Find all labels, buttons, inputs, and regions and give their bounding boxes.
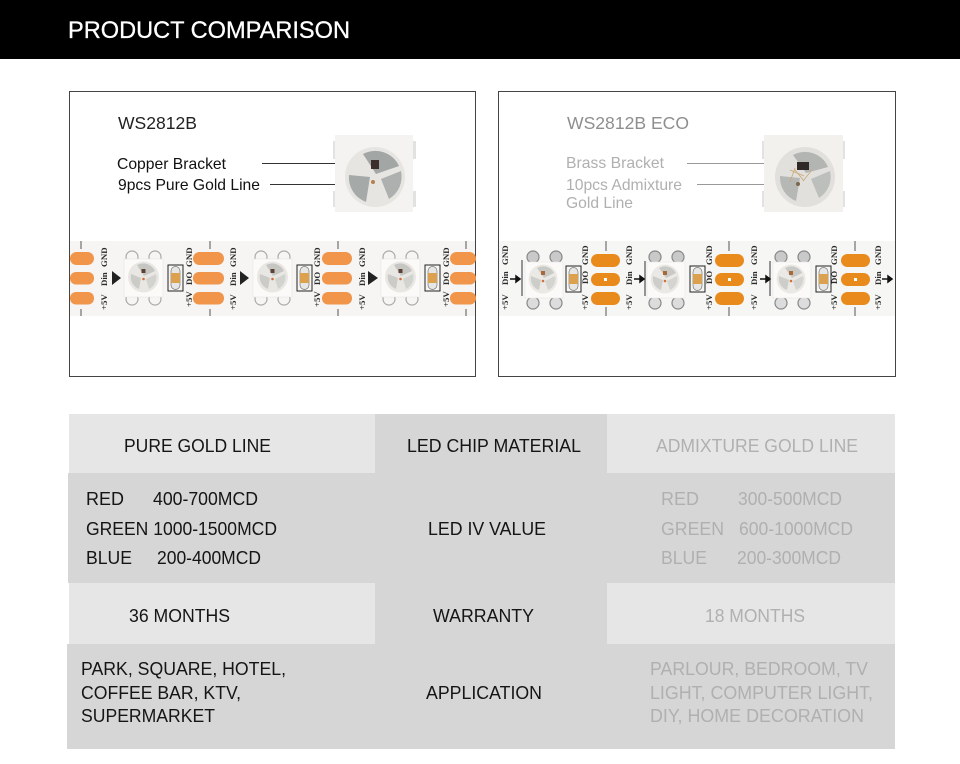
row: LED chip material: ADMIXTURE GOLD LINE bbox=[656, 436, 858, 456]
heading: WS2812B ECO: WS2812B ECO bbox=[567, 113, 689, 133]
LED strip: GND bbox=[228, 247, 238, 267]
row: LED IV value: LED IV VALUE bbox=[428, 519, 546, 539]
row: LED IV value bbox=[68, 473, 895, 583]
LED strip bbox=[70, 241, 476, 316]
LED strip: +5V bbox=[441, 291, 451, 307]
LED strip: +5V bbox=[312, 291, 322, 307]
row: warranty: 36 MONTHS bbox=[129, 606, 230, 626]
LED strip: GND bbox=[580, 245, 590, 265]
label: copper bracket: Copper Bracket bbox=[117, 156, 227, 173]
LED strip: Din bbox=[500, 271, 510, 285]
LED strip: GND bbox=[624, 245, 634, 265]
comparison table bbox=[67, 414, 895, 749]
row: LED IV value: 300-500MCD bbox=[738, 489, 842, 509]
row: application: SUPERMARKET bbox=[81, 706, 215, 726]
LED strip: +5V bbox=[357, 294, 367, 310]
LED strip: GND bbox=[99, 247, 109, 267]
row: LED IV value: BLUE bbox=[661, 548, 707, 568]
LED strip: +5V bbox=[184, 291, 194, 307]
row: warranty: WARRANTY bbox=[433, 606, 534, 626]
row: LED IV value: 200-300MCD bbox=[737, 548, 841, 568]
panel: WS2812B bbox=[70, 92, 476, 376]
label: admixture gold line: 10pcs Admixture bbox=[566, 177, 682, 194]
row: application: DIY, HOME DECORATION bbox=[650, 706, 864, 726]
LED strip: DO bbox=[580, 271, 590, 284]
row: LED IV value: RED bbox=[86, 489, 124, 509]
label: gold line: 9pcs Pure Gold Line bbox=[118, 177, 260, 194]
LED strip: GND bbox=[704, 245, 714, 265]
LED strip: Din bbox=[873, 271, 883, 285]
LED strip: DO bbox=[704, 271, 714, 284]
row: LED chip material bbox=[69, 414, 895, 473]
row: warranty bbox=[69, 583, 895, 644]
LED strip: GND bbox=[441, 247, 451, 267]
row: LED IV value: GREEN 1000-1500MCD bbox=[86, 519, 277, 539]
row: application: PARK, SQUARE, HOTEL, bbox=[81, 659, 286, 679]
LED strip: +5V bbox=[500, 294, 510, 310]
LED strip bbox=[499, 241, 895, 316]
LED strip: GND bbox=[873, 245, 883, 265]
LED strip: GND bbox=[357, 247, 367, 267]
LED strip: +5V bbox=[873, 294, 883, 310]
title: PRODUCT COMPARISON bbox=[68, 17, 350, 44]
row: application: PARLOUR, BEDROOM, TV bbox=[650, 659, 868, 679]
row: LED chip material: LED CHIP MATERIAL bbox=[407, 436, 581, 456]
LED strip: +5V bbox=[228, 294, 238, 310]
LED strip: +5V bbox=[704, 294, 714, 310]
row: LED IV value: RED bbox=[661, 489, 699, 509]
LED strip: DO bbox=[312, 272, 322, 285]
label: admixture gold line bbox=[566, 177, 790, 212]
panel: WS2812B ECO bbox=[498, 92, 896, 376]
heading: WS2812B: WS2812B bbox=[118, 113, 197, 133]
row: LED IV value: BLUE bbox=[86, 548, 132, 568]
LED strip: Din bbox=[99, 272, 109, 286]
LED strip: DO bbox=[441, 272, 451, 285]
row: application: APPLICATION bbox=[426, 683, 542, 703]
LED strip: Din bbox=[357, 272, 367, 286]
LED strip: GND bbox=[749, 245, 759, 265]
LED strip: +5V bbox=[624, 294, 634, 310]
label: brass bracket: Brass Bracket bbox=[566, 155, 665, 172]
LED strip: Din bbox=[228, 272, 238, 286]
row: application: COFFEE BAR, KTV, bbox=[81, 683, 241, 703]
row: LED IV value: 400-700MCD bbox=[153, 489, 258, 509]
icon: ECO LED chip close-up bbox=[762, 135, 845, 212]
LED strip: +5V bbox=[99, 294, 109, 310]
label: admixture gold line: Gold Line bbox=[566, 195, 633, 212]
LED strip: Din bbox=[749, 271, 759, 285]
row: application: LIGHT, COMPUTER LIGHT, bbox=[650, 683, 873, 703]
row: LED IV value: 600-1000MCD bbox=[739, 519, 853, 539]
row: warranty: 18 MONTHS bbox=[705, 606, 805, 626]
icon: LED chip close-up bbox=[333, 135, 416, 212]
LED strip: +5V bbox=[749, 294, 759, 310]
LED strip: +5V bbox=[580, 294, 590, 310]
LED strip: GND bbox=[500, 245, 510, 265]
LED strip: GND bbox=[829, 245, 839, 265]
LED strip: GND bbox=[312, 247, 322, 267]
LED strip: GND bbox=[184, 247, 194, 267]
LED strip: DO bbox=[184, 272, 194, 285]
row: LED IV value: 200-400MCD bbox=[157, 548, 261, 568]
LED strip: DO bbox=[829, 271, 839, 284]
header bar bbox=[0, 0, 960, 59]
row: LED chip material: PURE GOLD LINE bbox=[124, 436, 271, 456]
LED strip: Din bbox=[624, 271, 634, 285]
row: LED IV value: GREEN bbox=[661, 519, 724, 539]
row: application bbox=[67, 644, 895, 749]
LED strip: +5V bbox=[829, 294, 839, 310]
